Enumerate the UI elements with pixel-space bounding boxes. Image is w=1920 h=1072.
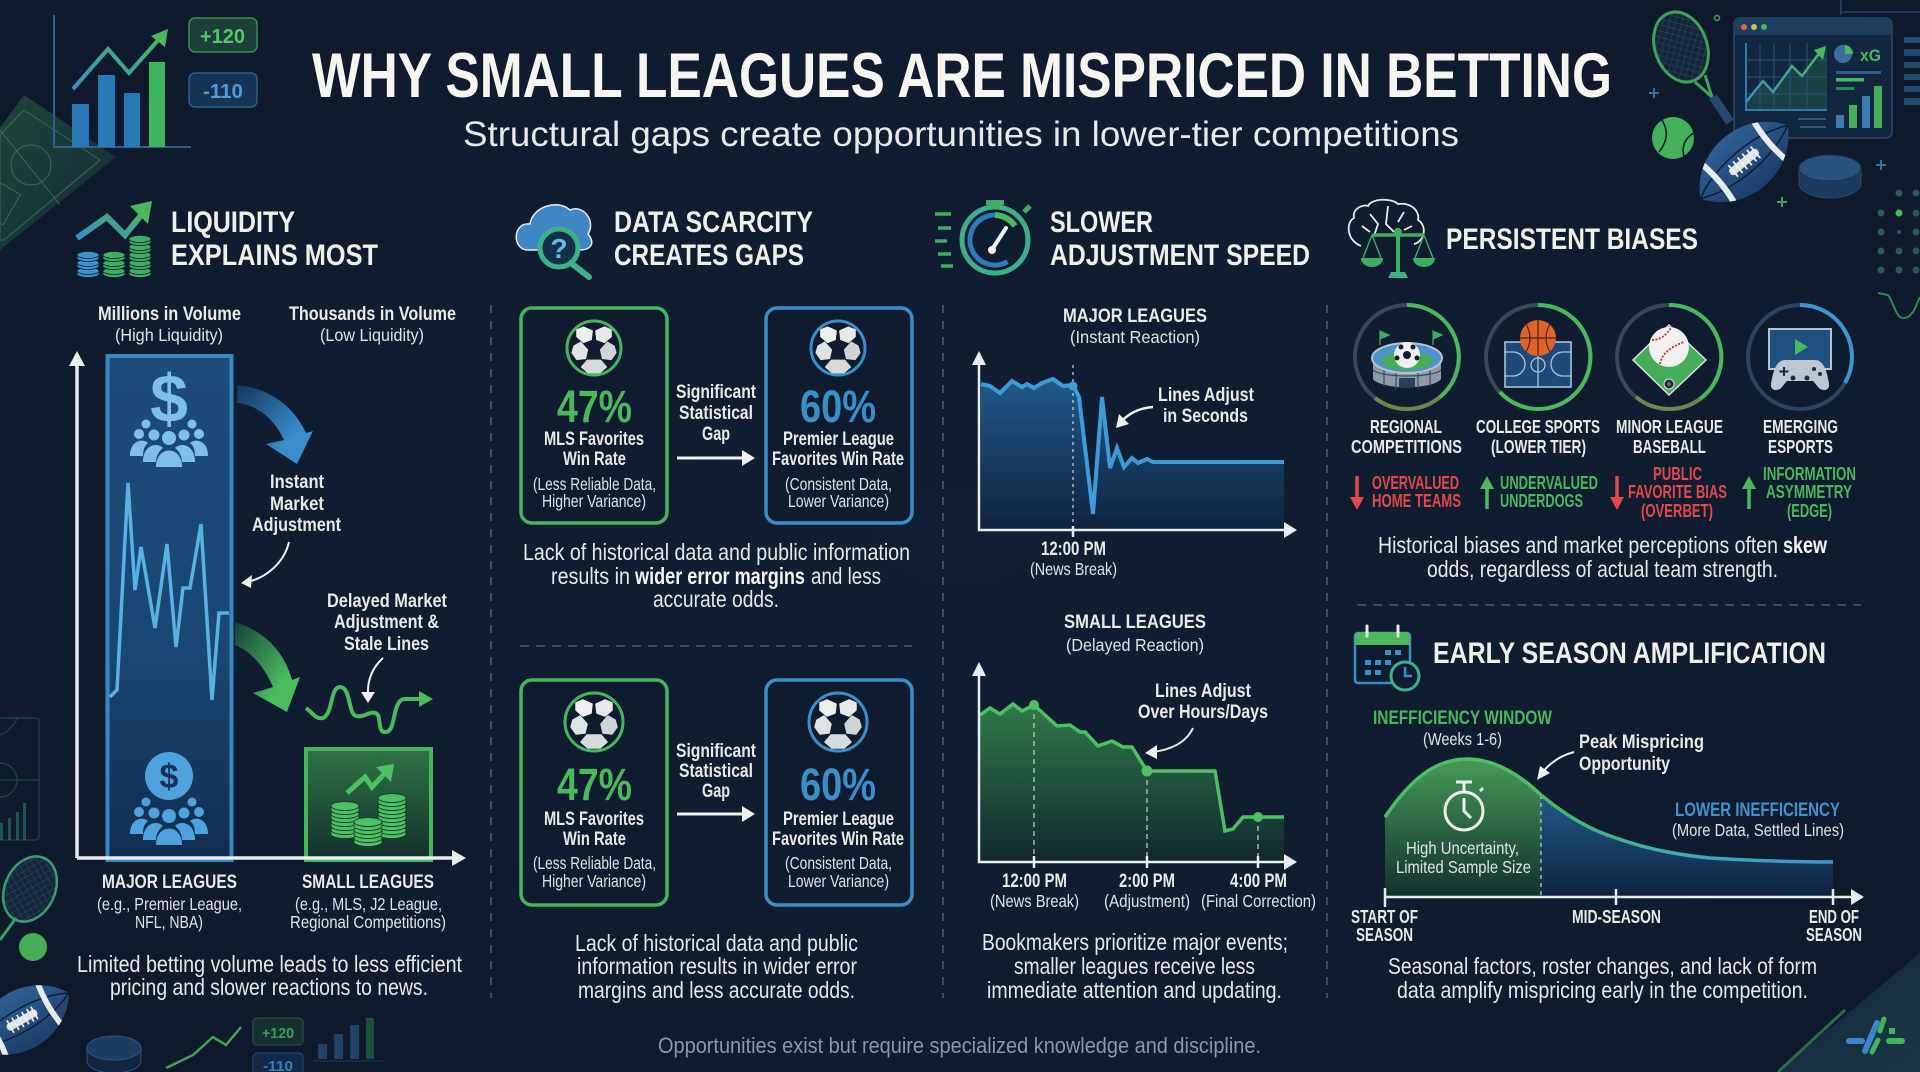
- bar chart: liquidity by league size: [69, 351, 466, 866]
- item: minor league baseball: [1616, 305, 1723, 457]
- annotation: lines adjust over hours: [1138, 681, 1268, 759]
- arrow: delayed flow: [235, 622, 300, 712]
- statistical gap arrow upper: Statistical: [679, 403, 753, 424]
- axis label: news break: (News Break): [1030, 559, 1117, 579]
- text: speed note: smaller leagues receive less: [1014, 953, 1255, 979]
- line chart: major leagues instant reaction: [972, 351, 1297, 538]
- card: MLS favorites upper: (Less Reliable Data,: [533, 474, 656, 494]
- decoration: faded sport items bottom-left: [0, 718, 383, 1072]
- bar: major leagues: $: [150, 361, 188, 437]
- card: premier league upper: 60%: [800, 381, 876, 432]
- heading: liquidity: LIQUIDITY: [171, 206, 295, 239]
- annotation: peak mispricing opportunity: [1537, 732, 1704, 780]
- item: regional competitions: [1351, 305, 1462, 457]
- annotation: lines adjust in seconds: Lines Adjust: [1158, 385, 1255, 406]
- card: premier league lower: Favorites Win Rate: [772, 829, 904, 850]
- label: instant market adjustment: Market: [270, 494, 325, 515]
- card: MLS favorites lower: (Less Reliable Data,: [533, 853, 656, 873]
- heading: data scarcity: CREATES GAPS: [614, 239, 804, 272]
- icon: stopwatch: [1445, 782, 1483, 830]
- axis labels: time points: (Adjustment): [1104, 891, 1190, 911]
- label: delayed market adjustment: Delayed Market: [327, 591, 448, 612]
- card: premier league lower: (Consistent Data,: [785, 853, 892, 873]
- heading: slower adjustment: [1050, 206, 1310, 272]
- card: MLS favorites lower: MLS Favorites: [544, 809, 644, 830]
- icon: screen and gamepad: [1769, 329, 1831, 390]
- axis labels: time points: 12:00 PM: [1002, 871, 1067, 892]
- label: instant market adjustment: Instant: [270, 472, 325, 493]
- axis labels: time points: (Final Correction): [1201, 891, 1316, 911]
- decoration: rising chart with odds badges top-left: -110: [203, 81, 243, 103]
- item: minor league baseball: BASEBALL: [1633, 437, 1706, 457]
- bias: undervalued underdogs: [1480, 473, 1598, 511]
- statistical gap arrow upper: [676, 382, 757, 466]
- arrow: instant flow: [237, 385, 313, 464]
- axis labels: season: END OF: [1809, 907, 1859, 927]
- statistical gap arrow lower: Statistical: [679, 761, 753, 782]
- volume label: major: [98, 304, 241, 345]
- text: liquidity note: [77, 951, 463, 1000]
- axis labels: season: START OF: [1351, 907, 1418, 927]
- axis labels: season: MID-SEASON: [1572, 907, 1661, 927]
- bias: overvalued home teams: HOME TEAMS: [1372, 491, 1461, 511]
- text: data note lower: Lack of historical data and public: [575, 930, 858, 956]
- arrow: to stale line: [361, 658, 383, 703]
- annotation: lines adjust over hours: Over Hours/Days: [1138, 702, 1268, 723]
- item: college sports: [1476, 305, 1600, 457]
- icon: cloud and magnifier: ?: [550, 233, 568, 264]
- label: inefficiency window: (Weeks 1-6): [1423, 729, 1502, 749]
- decoration: rising chart with odds badges top-left: [54, 15, 257, 147]
- label: delayed market adjustment: Adjustment &: [334, 612, 439, 633]
- label: instant market adjustment: [252, 472, 342, 536]
- label: inefficiency window: INEFFICIENCY WINDOW: [1373, 708, 1552, 729]
- icon: liquidity coins and trend: [77, 201, 152, 278]
- line chart: small leagues delayed reaction: [972, 662, 1297, 870]
- arrow: to major bar: [241, 542, 289, 588]
- item: college sports: COLLEGE SPORTS: [1476, 417, 1600, 437]
- text: biases note: odds, regardless of actual team strength.: [1427, 556, 1778, 582]
- text: data note upper: Lack of historical data and public information: [523, 539, 910, 565]
- statistical gap arrow upper: Gap: [702, 424, 730, 445]
- icon: cloud and magnifier: [516, 205, 592, 277]
- text: data note upper: accurate odds.: [653, 586, 779, 612]
- label: delayed market adjustment: Stale Lines: [344, 634, 429, 655]
- icon: brain and scale: [1349, 200, 1435, 278]
- volume label: small: Thousands in Volume: [289, 304, 456, 325]
- text: data note upper: and less: [811, 563, 881, 589]
- bias: overvalued home teams: OVERVALUED: [1372, 473, 1459, 493]
- volume label: small: (Low Liquidity): [320, 325, 424, 345]
- item: emerging esports: EMERGING: [1763, 417, 1838, 437]
- label: major leagues: [97, 872, 242, 932]
- label: small leagues: [290, 872, 446, 932]
- statistical gap arrow lower: Gap: [702, 781, 730, 802]
- label: instant market adjustment: Adjustment: [252, 515, 342, 536]
- decoration: soccer field top-left: [0, 95, 116, 250]
- text: data note lower: margins and less accurate odds.: [578, 977, 855, 1003]
- heading: liquidity: [171, 206, 378, 272]
- bias: overvalued home teams: [1350, 473, 1461, 511]
- axis labels: season: SEASON: [1356, 925, 1413, 945]
- item: emerging esports: ESPORTS: [1768, 437, 1833, 457]
- bar: major leagues: [108, 356, 232, 860]
- card: MLS favorites lower: 47%: [557, 759, 632, 810]
- label: lower inefficiency: [1672, 800, 1844, 840]
- footer note: Opportunities exist but require specialized knowledge and discipline.: [658, 1033, 1261, 1058]
- heading: slower adjustment: ADJUSTMENT SPEED: [1050, 239, 1310, 272]
- text: biases note: [1378, 532, 1827, 582]
- text: high uncertainty: [1396, 838, 1531, 877]
- annotation: lines adjust over hours: Lines Adjust: [1155, 681, 1252, 702]
- item: emerging esports: [1748, 305, 1852, 457]
- bias: information asymmetry: (EDGE): [1787, 501, 1832, 521]
- decoration: sports gear and dashboard top-right: xG: [1860, 46, 1881, 65]
- heading: liquidity: EXPLAINS MOST: [171, 239, 378, 272]
- label: inefficiency window: [1373, 708, 1552, 749]
- card: premier league lower: Premier League: [783, 809, 894, 830]
- statistical gap arrow lower: [676, 741, 757, 822]
- icon: stopwatch: [935, 200, 1030, 274]
- axis label: news break: [1030, 539, 1117, 579]
- label: major leagues: NFL, NBA): [135, 912, 203, 932]
- text: season note: data amplify mispricing early in the competition.: [1397, 977, 1808, 1003]
- icon: basketball court: [1505, 320, 1571, 387]
- text: speed note: Bookmakers prioritize major events;: [982, 929, 1288, 955]
- label: small leagues chart: SMALL LEAGUES: [1064, 612, 1206, 633]
- icon: calendar and clock: [1355, 626, 1419, 690]
- label: delayed market adjustment: [327, 591, 448, 655]
- panel: persistent biases: [1349, 200, 1856, 582]
- bias: information asymmetry: INFORMATION: [1763, 464, 1856, 484]
- label: major leagues chart: MAJOR LEAGUES: [1063, 306, 1207, 327]
- decoration: bottom-right corner with logo: [1778, 953, 1920, 1072]
- bias: undervalued underdogs: UNDERVALUED: [1500, 473, 1598, 493]
- icon: baseball diamond: [1633, 325, 1706, 395]
- item: regional competitions: REGIONAL: [1370, 417, 1442, 437]
- text: biases note: Historical biases and market perceptions often: [1378, 532, 1778, 558]
- bias: undervalued underdogs: UNDERDOGS: [1500, 491, 1583, 511]
- heading: persistent biases: PERSISTENT BIASES: [1446, 223, 1698, 256]
- card: premier league upper: (Consistent Data,: [785, 474, 892, 494]
- subtitle: Structural gaps create opportunities in lower-tier competitions: [463, 115, 1459, 154]
- label: small leagues: Regional Competitions): [290, 912, 446, 932]
- volume label: small: [289, 304, 456, 345]
- axis labels: time points: (News Break): [990, 891, 1079, 911]
- card: premier league lower: Lower Variance): [788, 871, 889, 891]
- text: data note upper: wider error margins: [634, 563, 805, 589]
- text: data note lower: information results in wider error: [577, 953, 857, 979]
- label: major leagues chart: (Instant Reaction): [1070, 327, 1200, 347]
- axis label: news break: 12:00 PM: [1041, 539, 1106, 560]
- label: lower inefficiency: (More Data, Settled Lines): [1672, 820, 1844, 840]
- text: data note lower: [575, 930, 858, 1003]
- card: MLS favorites upper: 47%: [557, 381, 632, 432]
- text: data note upper: [523, 539, 910, 612]
- statistical gap arrow lower: Significant: [676, 741, 757, 762]
- volume label: major: (High Liquidity): [115, 325, 223, 345]
- decoration: faded sport items bottom-left: +120: [262, 1025, 294, 1042]
- decoration: sports gear and dashboard top-right: [1644, 0, 1920, 318]
- bias: public favorite bias: (OVERBET): [1641, 501, 1713, 521]
- card: premier league upper: Lower Variance): [788, 491, 889, 511]
- card: premier league upper: Favorites Win Rate: [772, 449, 904, 470]
- bias: public favorite bias: PUBLIC: [1653, 464, 1702, 484]
- icon: stadium: [1372, 331, 1442, 389]
- card: premier league upper: [766, 308, 912, 523]
- label: lower inefficiency: LOWER INEFFICIENCY: [1675, 800, 1840, 821]
- decoration: rising chart with odds badges top-left: +120: [200, 26, 245, 48]
- card: MLS favorites upper: [521, 308, 667, 523]
- text: data note upper: results in: [551, 563, 630, 589]
- axis labels: time points: 4:00 PM: [1230, 871, 1287, 892]
- annotation: peak mispricing opportunity: Peak Mispricing: [1579, 732, 1704, 753]
- annotation: peak mispricing opportunity: Opportunity: [1579, 754, 1670, 775]
- text: high uncertainty: Limited Sample Size: [1396, 857, 1531, 877]
- annotation: lines adjust in seconds: in Seconds: [1163, 406, 1248, 427]
- bias: information asymmetry: ASYMMETRY: [1766, 482, 1852, 502]
- heading: data scarcity: DATA SCARCITY: [614, 206, 813, 239]
- bias: information asymmetry: [1742, 464, 1856, 521]
- label: major leagues: MAJOR LEAGUES: [102, 872, 237, 893]
- card: MLS favorites upper: Win Rate: [563, 449, 626, 470]
- text: speed note: immediate attention and updating.: [987, 977, 1282, 1003]
- card: MLS favorites upper: Higher Variance): [542, 491, 646, 511]
- area chart: season inefficiency curve: [1385, 759, 1864, 907]
- panel: data scarcity creates gaps: [516, 205, 912, 1003]
- text: season note: [1388, 953, 1817, 1003]
- label: small leagues chart: [1064, 612, 1206, 655]
- card: MLS favorites lower: Win Rate: [563, 829, 626, 850]
- text: liquidity note: Limited betting volume leads to less efficient: [77, 951, 463, 977]
- axis labels: season: SEASON: [1806, 925, 1862, 945]
- label: small leagues: (e.g., MLS, J2 League,: [295, 894, 442, 914]
- panel: early season amplification: [1351, 626, 1864, 1003]
- annotation: lines adjust in seconds: [1116, 385, 1255, 428]
- stale line squiggle: [306, 687, 433, 732]
- bias: public favorite bias: [1610, 464, 1727, 521]
- text: biases note: skew: [1783, 532, 1827, 558]
- volume label: major: Millions in Volume: [98, 304, 241, 325]
- heading: early season amplification: EARLY SEASON AMPLIFICATION: [1433, 637, 1826, 670]
- panel: liquidity explains most: [69, 201, 466, 1000]
- card: MLS favorites lower: [521, 680, 667, 905]
- item: minor league baseball: MINOR LEAGUE: [1616, 417, 1723, 437]
- item: regional competitions: COMPETITIONS: [1351, 437, 1462, 457]
- text: season note: Seasonal factors, roster changes, and lack of form: [1388, 953, 1817, 979]
- card: MLS favorites upper: MLS Favorites: [544, 429, 644, 450]
- label: major leagues: (e.g., Premier League,: [97, 894, 242, 914]
- axis labels: season: [1351, 907, 1862, 945]
- heading: slower adjustment: SLOWER: [1050, 206, 1153, 239]
- card: MLS favorites lower: Higher Variance): [542, 871, 646, 891]
- label: small leagues: SMALL LEAGUES: [302, 872, 434, 893]
- panel: slower adjustment speed: [935, 200, 1316, 1003]
- bar: major leagues: $: [160, 758, 179, 796]
- text: speed note: [982, 929, 1288, 1003]
- statistical gap arrow upper: Significant: [676, 382, 757, 403]
- card: premier league upper: Premier League: [783, 429, 894, 450]
- bias: public favorite bias: FAVORITE BIAS: [1628, 482, 1727, 502]
- bar: small leagues: [306, 749, 431, 860]
- title: WHY SMALL LEAGUES ARE MISPRICED IN BETTING: [312, 41, 1612, 111]
- card: premier league lower: [766, 680, 912, 905]
- axes: [77, 358, 458, 858]
- label: small leagues chart: (Delayed Reaction): [1066, 635, 1204, 655]
- text: high uncertainty: High Uncertainty,: [1406, 838, 1519, 858]
- card: premier league lower: 60%: [800, 759, 876, 810]
- heading: data scarcity: [614, 206, 813, 272]
- label: major leagues chart: [1063, 306, 1207, 347]
- axis labels: time points: 2:00 PM: [1119, 871, 1175, 892]
- axis labels: time points: [990, 871, 1316, 911]
- item: college sports: (LOWER TIER): [1491, 437, 1586, 457]
- text: liquidity note: pricing and slower reactions to news.: [110, 974, 428, 1000]
